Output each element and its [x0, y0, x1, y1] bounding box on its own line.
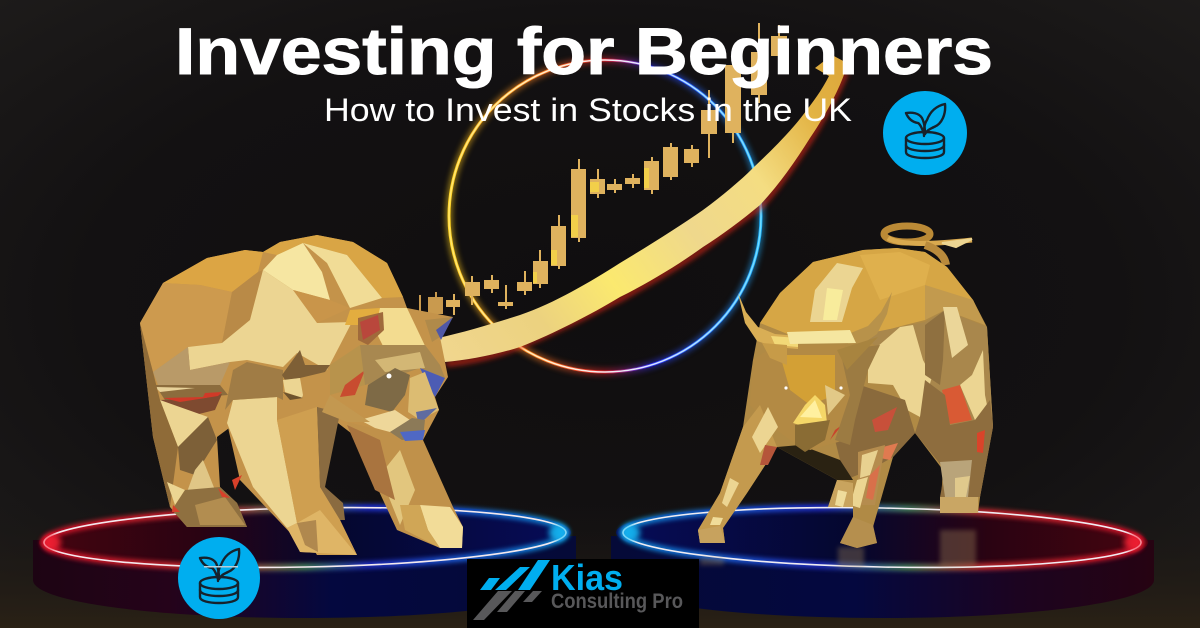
candlestick chart: [419, 23, 787, 316]
left ring: [42, 503, 568, 572]
logo tagline: Consulting Pro: [551, 590, 683, 613]
hoof reflections: [700, 530, 976, 567]
bull horns: [738, 292, 892, 370]
left platform: [33, 499, 576, 618]
logo mark: [473, 560, 550, 620]
icon: plant growing from coins, top right: [883, 91, 967, 175]
bull head: [750, 345, 880, 452]
low-poly gold bull: [698, 226, 993, 548]
logo wordmark: Kias: [551, 557, 623, 598]
neon circle: [449, 60, 761, 372]
logo: Kias Consulting Pro: [467, 557, 699, 628]
bear facets: [140, 235, 463, 555]
right ring: [621, 503, 1143, 572]
bull silhouette: [698, 248, 993, 548]
bear eyes: [386, 374, 392, 378]
bull facets: [698, 248, 993, 548]
bull left leg: [698, 405, 778, 543]
right platform: [611, 499, 1154, 618]
rising gold arrow: [438, 55, 847, 364]
bull tail: [884, 226, 972, 265]
bear silhouette: [140, 235, 463, 555]
icon: plant growing from coins, bottom left: [178, 537, 260, 619]
low-poly gold bear: [140, 235, 463, 555]
bull eyes: [784, 386, 843, 390]
subtitle: How to Invest in Stocks in the UK: [324, 92, 852, 128]
title: Investing for Beginners: [175, 14, 993, 88]
